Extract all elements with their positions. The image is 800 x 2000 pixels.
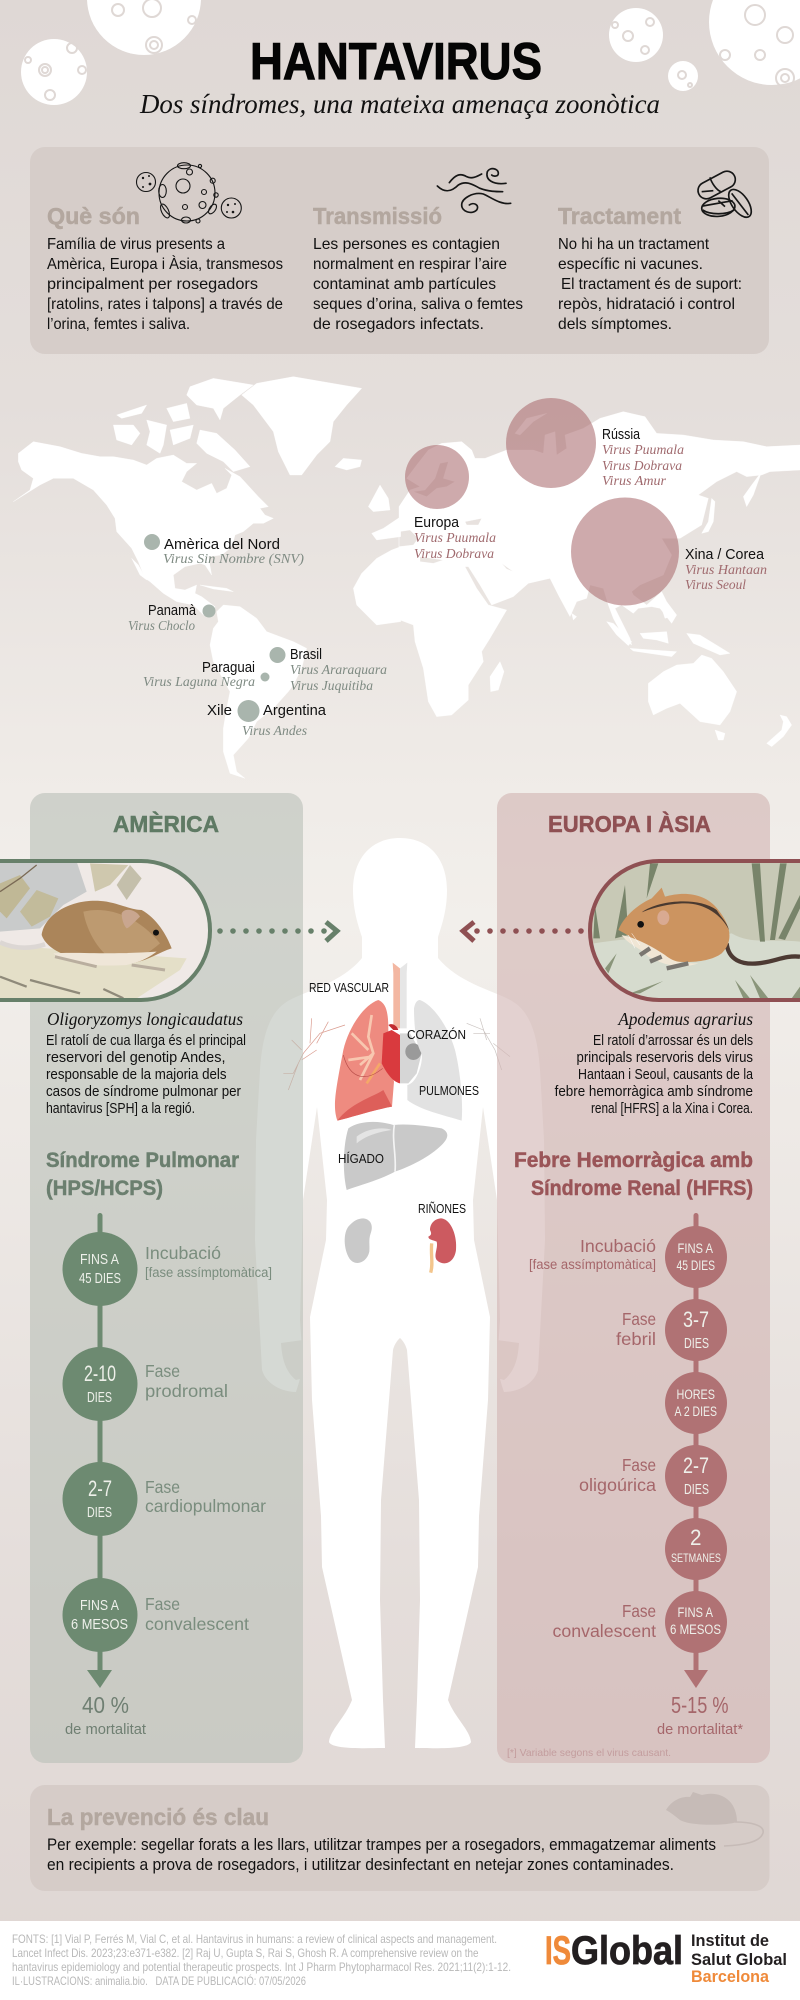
stage: incubació: [fase assímptomàtica]: [529, 1257, 656, 1272]
panel: Europa i Àsia background: [497, 793, 770, 1763]
stage: prodromal: Fase: [145, 1361, 180, 1381]
label: Xina / Corea: Virus Hantaan: [685, 563, 767, 578]
dotted arrow: right-pointing: [217, 922, 337, 941]
mortality: 40%: [65, 1692, 147, 1738]
text: Apodemus: Apodemus agrarius: [617, 1009, 753, 1029]
text: què són: principalment per rosegadors: [47, 276, 258, 293]
label: Europa: Europa: [414, 515, 460, 531]
heading: transmissió: Transmissió: [313, 203, 442, 229]
stage: incubació: [529, 1226, 727, 1288]
heading: tractament: Tractament: [558, 203, 681, 229]
stage: incubació: Incubació: [145, 1243, 221, 1263]
label: Xile and Argentina: Argentina: [263, 703, 327, 719]
logo: ISGlobal: Barcelona: [691, 1968, 770, 1986]
organ: liver: [344, 1122, 447, 1190]
stage: oligoúrica: [579, 1445, 727, 1507]
text: tractament: dels símptomes.: [558, 316, 672, 333]
heading: Febre Hemorràgica: Síndrome Renal (HFRS): [531, 1176, 753, 1200]
stage: incubació: [fase assímptomàtica]: [145, 1265, 272, 1280]
mortality: 5-15%: de mortalitat*: [657, 1721, 743, 1738]
stage: incubació: 45 DIES: [676, 1258, 715, 1273]
organ: right lung: [407, 1000, 462, 1121]
heading: què són: Què són: [47, 203, 140, 229]
footnote: [*] Variable segons el virus causant.: [507, 1747, 671, 1759]
stage: incubació: Incubació: [580, 1236, 656, 1256]
organ: trachea: [393, 963, 407, 1028]
label: Xile and Argentina: Virus Andes: [242, 724, 308, 739]
stage: oligoúrica: DIES: [684, 1482, 709, 1498]
stage: convalescent: FINS A: [678, 1605, 713, 1620]
label: Panamà: Virus Choclo: [128, 619, 195, 634]
decorative virus particles: [21, 0, 800, 105]
timeline: HPS: [62, 1213, 272, 1688]
timeline: HFRS: [529, 1213, 727, 1688]
label: Europa: Virus Puumala: [414, 531, 496, 546]
stage: hipotensiva: [665, 1372, 727, 1434]
organ labels: CORAZÓN: [407, 1027, 466, 1042]
organs: [283, 963, 510, 1273]
stage: convalescent: Fase: [145, 1594, 180, 1614]
mortality: 40%: de mortalitat: [65, 1721, 147, 1738]
mortality: 5-15%: [657, 1692, 743, 1738]
stage: poliúrica: SETMANES: [671, 1551, 721, 1565]
footer band: [0, 1921, 800, 2000]
stage: oligoúrica: 2-7: [683, 1453, 709, 1478]
label: Xina / Corea: [685, 547, 767, 593]
subtitle: Dos síndromes, una mateixa amenaça zoonòtica: [139, 89, 660, 119]
organ labels: RIÑONES: [418, 1202, 466, 1216]
text: Apodemus: [555, 1009, 754, 1117]
title: HANTAVIRUS: [250, 33, 542, 91]
heading: Síndrome Pulmonar: Síndrome Pulmonar: [46, 1148, 240, 1172]
dotted arrow: left-pointing: [463, 922, 584, 941]
image capsule: striped field mouse: [585, 861, 800, 1005]
label: Xina / Corea: Xina / Corea: [685, 547, 765, 563]
text: què són: [ratolins, rates i talpons] a través de: [47, 296, 283, 313]
label: Brasil: [290, 647, 387, 694]
stage: cardiopulmonar: [62, 1462, 266, 1536]
label: Rússia: [602, 427, 684, 489]
icon: wind: [437, 169, 511, 212]
stage: febril: febril: [616, 1329, 656, 1349]
text: transmissió: contaminat amb partícules: [313, 276, 496, 293]
label: Paraguai: [143, 660, 255, 690]
text: prevention: [47, 1836, 716, 1874]
text: transmissió: [313, 236, 523, 333]
stage: poliúrica: [665, 1518, 727, 1580]
text: què són: [47, 236, 283, 333]
panel: intro facts: [30, 147, 769, 354]
text: tractament: específic ni vacunes.: [558, 256, 703, 273]
heading: Febre Hemorràgica: [514, 1148, 753, 1200]
organ: left lung: [335, 1000, 394, 1121]
circle: Rússia: [506, 398, 596, 488]
footer sources: Lancet Infect Dis. 2023;23:e371-e382. [2] Raj U, Gupta S, Rai S, Ghosh R. A comprehensive review on the: [12, 1946, 479, 1960]
label: Amèrica del Nord: Amèrica del Nord: [164, 537, 280, 553]
text: tractament: repòs, hidratació i control: [558, 296, 735, 313]
label: Rússia: Virus Amur: [602, 474, 667, 489]
text: prevention: en recipients a prova de rosegadors, i utilitzar desinfectant en netejar zones contaminades.: [47, 1856, 674, 1874]
heading: Febre Hemorràgica: Febre Hemorràgica amb: [514, 1148, 753, 1172]
text: què són: Amèrica, Europa i Àsia, transmesos: [47, 254, 283, 273]
stage: convalescent: convalescent: [552, 1621, 656, 1641]
stage: febril: [616, 1299, 727, 1361]
footer sources: FONTS: [1] Vial P, Ferrés M, Vial C, et al. Hantavirus in humans: a review of clinical aspects and management.: [12, 1932, 497, 1946]
label: Xile and Argentina: [207, 703, 327, 739]
text: transmissió: seques d’orina, saliva o femtes: [313, 296, 523, 313]
image capsule: long-tailed rice rat: [0, 861, 210, 1000]
label: Paraguai: Paraguai: [202, 660, 255, 676]
circle: Xina / Corea: [571, 498, 679, 606]
stage: incubació: 45 DIES: [79, 1271, 121, 1287]
text: què són: Família de virus presents a: [47, 236, 225, 253]
heading: Síndrome Pulmonar: [46, 1148, 240, 1200]
organ labels: [309, 981, 479, 1216]
text: prevention: Per exemple: segellar forats a les llars, utilitzar trampes per a rosegadors, emmagatzemar aliments: [47, 1836, 716, 1854]
text: transmissió: Les persones es contagien: [313, 236, 500, 253]
heading: Amèrica: AMÈRICA: [113, 810, 219, 837]
footer sources: IL·LUSTRACIONS: animalia.bio. DATA DE PUBLICACIÓ: 07/05/2026: [12, 1973, 306, 1988]
label: Xile and Argentina: Xile: [207, 703, 232, 719]
stage: incubació: FINS A: [80, 1252, 119, 1268]
organ: kidney red with ureter: [428, 1218, 456, 1273]
stage: convalescent: 6 MESOS: [670, 1622, 721, 1637]
stage: convalescent: 6 MESOS: [71, 1617, 128, 1633]
stage: convalescent: [62, 1578, 249, 1652]
stage: poliúrica: 2: [690, 1525, 702, 1550]
icon: virus: [136, 163, 241, 223]
text: tractament: No hi ha un tractament: [558, 236, 710, 253]
text: tractament: El tractament és de suport:: [561, 276, 742, 293]
label: Rússia: Virus Puumala: [602, 443, 684, 458]
stage: febril: 3-7: [683, 1307, 709, 1332]
label: Xina / Corea: Virus Seoul: [685, 578, 746, 593]
stage: prodromal: DIES: [87, 1390, 112, 1406]
stage: prodromal: 2-10: [84, 1361, 116, 1386]
text: transmissió: de rosegadors infectats.: [313, 316, 484, 333]
stage: convalescent: convalescent: [145, 1614, 249, 1634]
text: Oligoryzomys: [46, 1009, 246, 1117]
label: Brasil: Brasil: [290, 647, 322, 663]
stage: oligoúrica: oligoúrica: [579, 1475, 656, 1495]
text: tractament: [558, 236, 742, 333]
text: Oligoryzomys: reservori del genotip Andes,: [46, 1050, 226, 1066]
panel: Amèrica background: [30, 793, 303, 1763]
label: Paraguai: Virus Laguna Negra: [143, 675, 255, 690]
stage: convalescent: [552, 1591, 727, 1653]
organ: heart: [382, 1024, 422, 1083]
text: transmissió: normalment en respirar l’aire: [313, 256, 507, 273]
logo: ISGlobal: Global: [571, 1929, 683, 1973]
label: Europa: Virus Dobrava: [414, 547, 494, 562]
label: Brasil: Virus Araraquara: [290, 663, 387, 678]
panel: prevention: [30, 1785, 770, 1891]
stage: hipotensiva: A 2 DIES: [674, 1404, 717, 1419]
stage: febril: DIES: [684, 1336, 709, 1352]
heading: Europa i Àsia: EUROPA I ÀSIA: [548, 810, 711, 837]
heading: prevention: La prevenció és clau: [47, 1804, 269, 1830]
human body silhouette: [255, 838, 545, 1748]
stage: convalescent: FINS A: [80, 1598, 119, 1614]
text: Apodemus: febre hemorràgica amb síndrome: [555, 1084, 753, 1100]
text: Apodemus: Hantaan i Seoul, causants de la: [578, 1067, 754, 1083]
text: Apodemus: renal [HFRS] a la Xina i Corea.: [591, 1101, 753, 1117]
world map: [13, 377, 800, 778]
organ labels: PULMONES: [419, 1084, 479, 1098]
stage: prodromal: prodromal: [145, 1381, 228, 1401]
text: Oligoryzomys: casos de síndrome pulmonar per: [46, 1084, 241, 1100]
organ labels: RED VASCULAR: [309, 981, 389, 995]
label: Panamà: Panamà: [148, 603, 197, 619]
stage: febril: Fase: [622, 1309, 656, 1329]
stage: cardiopulmonar: Fase: [145, 1477, 180, 1497]
logo: ISGlobal: IS: [545, 1929, 571, 1973]
logo: ISGlobal: Salut Global: [691, 1951, 787, 1969]
label: Amèrica del Nord: [163, 537, 304, 567]
map labels: [128, 427, 767, 739]
stage: convalescent: Fase: [622, 1601, 656, 1621]
circle: Europa: [405, 445, 469, 509]
logo: ISGlobal: Institut de: [691, 1932, 769, 1950]
stage: hipotensiva: HORES: [676, 1387, 715, 1402]
stage: cardiopulmonar: DIES: [87, 1505, 112, 1521]
label: Europa: [414, 515, 496, 562]
text: Apodemus: principals reservoris dels virus: [576, 1050, 753, 1066]
icon: pills: [695, 168, 756, 221]
logo: ISGlobal: [545, 1929, 787, 1986]
label: Panamà: [128, 603, 197, 634]
organ labels: HÍGADO: [338, 1151, 384, 1166]
label: Rússia: Virus Dobrava: [602, 459, 682, 474]
text: Apodemus: El ratolí d’arrossar és un dels: [593, 1033, 753, 1049]
mortality: 40%: 40 %: [82, 1692, 129, 1718]
organ: vascular network: [283, 1018, 510, 1090]
text: què són: l’orina, femtes i saliva.: [47, 316, 190, 333]
label: Rússia: Rússia: [602, 427, 641, 443]
stage: prodromal: [62, 1347, 228, 1421]
label: Brasil: Virus Juquitiba: [290, 679, 373, 694]
stage: cardiopulmonar: 2-7: [88, 1476, 112, 1501]
footer sources: hantavirus epidemiology and potential therapeutic prospects. Int J Pharm Phytopharmacol Res. 2021;11(2):1-12.: [12, 1960, 511, 1974]
footer sources: [12, 1932, 511, 1988]
icon: mouse silhouette: [666, 1792, 763, 1846]
text: Oligoryzomys: Oligoryzomys longicaudatus: [47, 1009, 243, 1029]
heading: Síndrome Pulmonar: (HPS/HCPS): [46, 1176, 163, 1200]
map dots: America: [144, 534, 286, 722]
mortality: 5-15%: 5-15 %: [671, 1692, 728, 1718]
organ: kidney grey: [345, 1218, 372, 1263]
text: Oligoryzomys: responsable de la majoria dels: [46, 1067, 226, 1083]
stage: incubació: FINS A: [678, 1241, 713, 1256]
text: Oligoryzomys: hantavirus [SPH] a la regió.: [46, 1101, 195, 1117]
stage: incubació: [62, 1232, 272, 1306]
map circles: [405, 398, 679, 606]
text: Oligoryzomys: El ratolí de cua llarga és el principal: [46, 1033, 246, 1049]
stage: oligoúrica: Fase: [622, 1455, 656, 1475]
label: Amèrica del Nord: Virus Sin Nombre (SNV): [163, 552, 304, 567]
stage: cardiopulmonar: cardiopulmonar: [145, 1496, 266, 1516]
